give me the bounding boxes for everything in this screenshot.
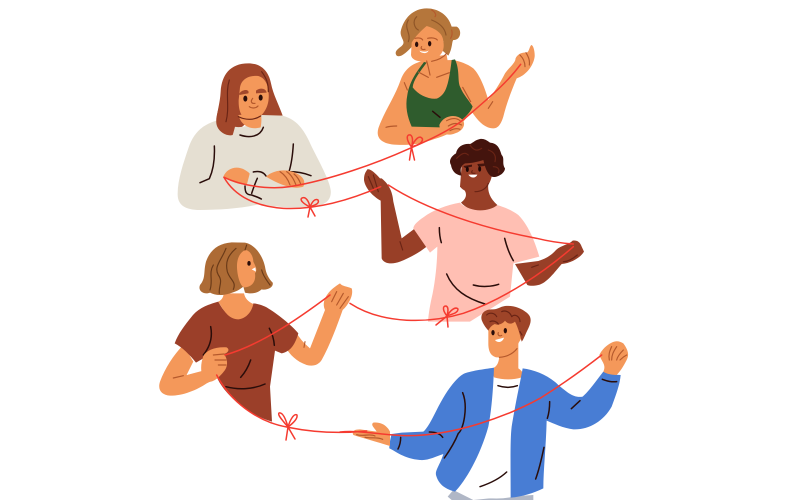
person: woman in beige sweater bbox=[178, 63, 331, 210]
string: blue cardigan man bbox=[340, 355, 602, 436]
bow: at green-top woman bbox=[407, 135, 422, 160]
string: man in pink to woman in red bbox=[350, 185, 573, 320]
red thread: strings bbox=[217, 64, 602, 440]
person: woman in brick-red dress bbox=[159, 242, 352, 422]
bow: at pink shirt bbox=[436, 306, 458, 327]
person: man in blue cardigan bbox=[353, 306, 628, 500]
bow: at brick-red dress bbox=[279, 413, 297, 440]
string: left woman to green-top woman bbox=[224, 64, 521, 209]
person: woman in green top bbox=[378, 8, 535, 145]
bow: at left woman bbox=[301, 198, 318, 217]
person: man in pink t-shirt bbox=[364, 139, 584, 322]
string: woman in red hand to hand bbox=[217, 295, 367, 432]
